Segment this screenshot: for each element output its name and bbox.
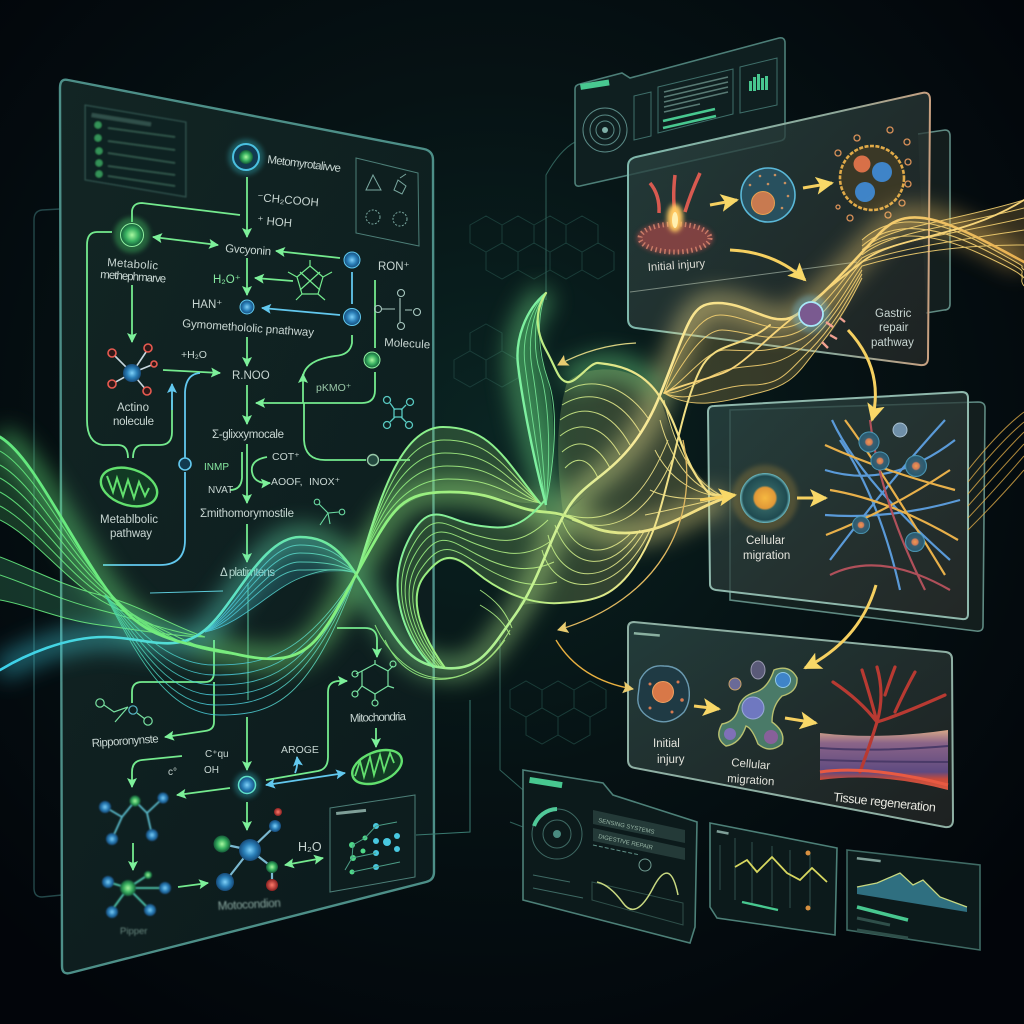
molecule: bottom left blue — [99, 792, 168, 845]
labels: central pathway text: +H₂O — [181, 349, 207, 361]
labels: central pathway text: ⁺ HOH — [257, 215, 292, 230]
icon: tissue with vessels — [820, 667, 948, 790]
labels: central pathway text: INOX⁺ — [309, 476, 341, 488]
backing frame: left panel — [34, 209, 62, 897]
backing panel: initial injury — [918, 130, 950, 313]
molecule: small lower middle — [314, 499, 345, 525]
inset: bottom right network — [330, 795, 415, 892]
waves: central green crest mesh — [357, 440, 557, 679]
icon: injury cell — [638, 666, 689, 766]
ribbon fills: translucent wave bodies — [0, 200, 1024, 668]
panel: top status card — [575, 38, 785, 186]
labels: central pathway text: Gymomethololic pnathway — [182, 318, 315, 339]
molecule: actino molecule: nolecule — [113, 416, 154, 428]
labels: central pathway text: c° — [168, 767, 177, 778]
node: bottom junction — [234, 772, 260, 798]
molecule: actino molecule — [108, 344, 157, 428]
molecule: bottom left green — [102, 871, 171, 918]
panel: bottom dashboard gauges: DIGESTIVE REPAIR — [598, 834, 654, 852]
label: gastric repair pathway: repair — [879, 322, 909, 334]
flow arrows: central column — [87, 177, 410, 887]
icon: dividing cell — [835, 127, 911, 221]
icon: migrating cell: Cellular — [746, 535, 785, 547]
molecule: mitochondria ring — [352, 660, 396, 706]
waves: bright core strands — [0, 200, 1024, 670]
labels: central pathway text: H₂O⁺ — [213, 274, 241, 286]
arrow: thin gold return to injury — [556, 640, 633, 689]
label: tissue regeneration: Tissue regeneration — [833, 790, 937, 815]
panel: bottom dashboard gauges: SENSING SYSTEMS — [598, 818, 655, 836]
arrow: migration to tissue — [785, 718, 816, 723]
arrow: cell to dividing cell — [803, 183, 832, 188]
labels: central pathway text: ⁻CH₂COOH — [257, 192, 319, 209]
labels: central pathway text: OH — [204, 765, 219, 776]
icon: migrating cell — [732, 465, 798, 562]
icon: round cell — [741, 168, 795, 222]
labels: central pathway text: R.NOO — [232, 370, 270, 382]
node: metabolic methephmarve — [100, 217, 166, 286]
molecule: small branch — [384, 396, 414, 428]
labels: central pathway text: COT⁺ — [272, 451, 300, 463]
labels: central pathway text: Molecule — [384, 337, 430, 351]
molecule: large bottom centre — [214, 808, 282, 891]
icon: injured tissue — [637, 173, 713, 274]
labels: central pathway text: AROGE — [281, 744, 319, 756]
labels: central pathway text: AOOF, — [271, 476, 303, 488]
node: metabolic methephmarve: methephmarve — [100, 269, 166, 286]
labels: central pathway text: pKMO⁺ — [316, 382, 352, 394]
molecule: ripporonynste — [96, 699, 152, 725]
waves: left green fan — [0, 451, 240, 655]
icon: injury cell: Initial — [653, 738, 680, 750]
nodes: pathway junctions — [179, 252, 380, 470]
node: top metabolite — [228, 139, 264, 175]
labels: central pathway text: Gvcyonin — [225, 243, 272, 258]
arrow: thin gold return lower — [558, 440, 687, 630]
icon: mitochondrion right — [347, 743, 407, 791]
inset: top right structures — [356, 158, 419, 246]
panel: bottom line chart — [710, 823, 837, 935]
panel: metabolic pathway — [60, 80, 434, 973]
icon: glowing cell on ribbon — [792, 295, 845, 348]
wave: central green flame — [517, 293, 555, 505]
waves: gold mesh — [664, 200, 1024, 403]
icon: injured tissue: Initial injury — [647, 258, 706, 274]
labels: central pathway text: Σ-glixxymocale — [212, 429, 284, 441]
labels: central pathway text: C⁺qu — [205, 749, 229, 760]
label: gastric repair pathway: Gastric — [875, 308, 912, 320]
molecule: actino molecule: Actino — [117, 402, 149, 414]
panel: initial injury and gastric repair — [628, 93, 930, 365]
label: gastric repair pathway — [871, 308, 914, 349]
arrow: migration panel to regeneration panel — [805, 585, 876, 668]
icon: migrating cell: migration — [743, 550, 790, 562]
labels: central pathway text: NVAT — [208, 485, 233, 496]
panel: regeneration sequence — [628, 622, 953, 827]
wave glow — [0, 217, 1024, 670]
panel: bottom area chart — [847, 850, 980, 950]
panel: cellular migration — [708, 392, 968, 619]
labels: central pathway text: Ripporonynste — [91, 733, 159, 750]
inset: top left legend — [85, 105, 186, 197]
node: metabolic methephmarve: Metabolic — [107, 257, 159, 273]
labels: central pathway text — [91, 192, 430, 937]
connector lines — [416, 142, 575, 835]
icon: mitochondrion left — [96, 461, 162, 540]
labels: central pathway text: INMP — [204, 462, 229, 473]
icon: migrating cell cluster — [719, 661, 797, 788]
labels: central pathway text: Δ platimtens — [220, 567, 275, 579]
icon: injury cell: injury — [657, 754, 685, 766]
icon: mitochondrion left: Metablbolic — [100, 514, 158, 526]
waves: blue arch mesh — [105, 545, 357, 715]
icon: migrating cell cluster: Cellular — [731, 757, 771, 772]
label: Metomyrotalivve: Metomyrotalivve — [267, 154, 342, 175]
labels: central pathway text: Mitochondria — [350, 711, 407, 725]
molecule: hexagonal structure — [288, 260, 332, 300]
molecule: right structure — [374, 290, 420, 330]
arrow: cell to matrix — [797, 496, 826, 500]
labels: central pathway text: RON⁺ — [378, 261, 410, 273]
label: gastric repair pathway: pathway — [871, 337, 914, 349]
arrow: wave ribbon head at migration — [700, 495, 735, 500]
labels: central pathway text: HAN⁺ — [192, 299, 222, 311]
arrow: thin gold return top — [558, 343, 636, 365]
backing panel: migration — [730, 402, 985, 631]
icon: mitochondrion left: pathway — [110, 528, 152, 540]
icon: migrating cell cluster: migration — [727, 773, 775, 788]
wave: right edge gold — [968, 412, 1024, 530]
labels: central pathway text: H₂O — [298, 840, 322, 854]
divider line in panel — [630, 262, 857, 292]
cells in matrix — [852, 423, 927, 552]
labels: central pathway text: Σmithomorymostile — [200, 508, 294, 520]
hexagon pattern: centre background — [454, 216, 614, 744]
labels: central pathway text: Pipper — [120, 926, 147, 937]
labels: central pathway text: Motocondion — [218, 898, 281, 913]
panel: bottom dashboard gauges — [523, 770, 697, 943]
arrow: injury to cell — [710, 200, 737, 205]
arrow: injury to migration — [694, 706, 719, 709]
fibre matrix — [825, 420, 960, 590]
waves: right lobe arcs — [542, 384, 725, 585]
arrow: injury to gastric pathway — [730, 250, 805, 280]
arrow: gastric pathway to migration panel — [848, 330, 875, 420]
